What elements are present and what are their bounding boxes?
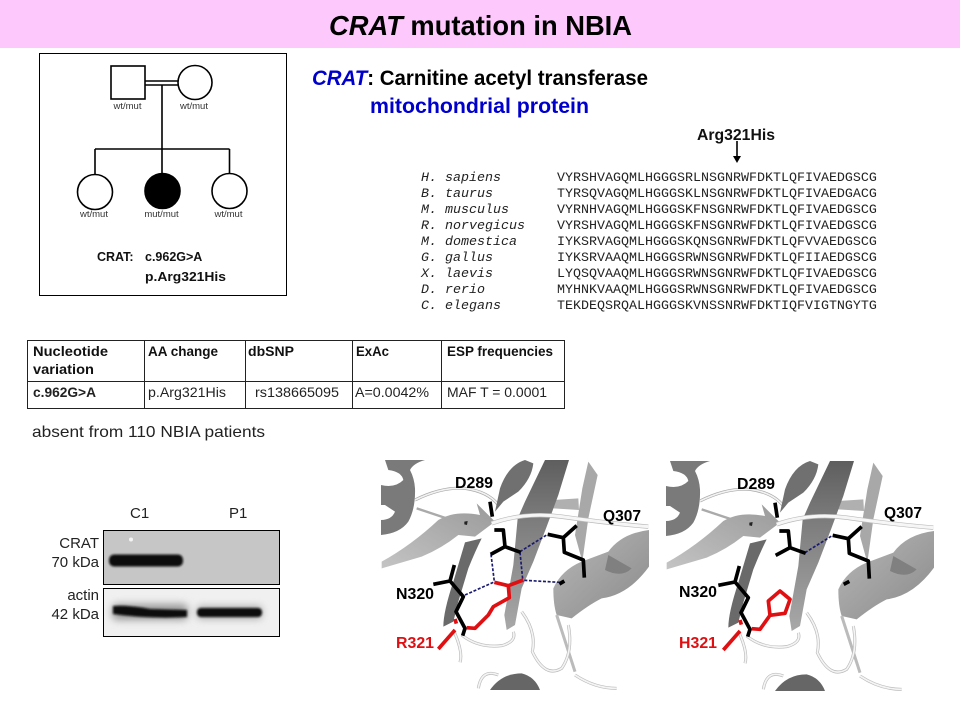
variant table bbox=[27, 340, 565, 409]
title banner: CRAT mutation in NBIA bbox=[329, 10, 632, 41]
genotype labels: wt/mut bbox=[179, 101, 208, 112]
table header: variation bbox=[33, 362, 94, 377]
note: absent from patients: absent from 110 NBIA patients bbox=[32, 424, 265, 441]
blot: CRAT bbox=[104, 530, 280, 584]
residue labels: Q307 bbox=[884, 505, 922, 522]
ribbons bbox=[666, 461, 934, 691]
lane labels: C1 bbox=[130, 505, 149, 522]
black residues bbox=[718, 503, 869, 637]
residue labels: R321 bbox=[396, 635, 434, 652]
blot labels: 42 kDa bbox=[51, 606, 100, 623]
blot: actin bbox=[104, 588, 280, 636]
table header: ESP frequencies bbox=[447, 344, 553, 359]
table row: p.Arg321His bbox=[148, 385, 226, 400]
sequence alignment: MYHNKVAAQMLHGGGSRWNSGNRWFDKTLQFIVAEDGSCG bbox=[557, 283, 877, 298]
red residue bbox=[723, 591, 790, 650]
child 3 symbol bbox=[212, 174, 247, 208]
sequence alignment: M. musculus bbox=[421, 203, 509, 218]
residue labels: D289 bbox=[737, 476, 775, 493]
sequence alignment: VYRSHVAGQMLHGGGSKFNSGNRWFDKTLQFIVAEDGSCG bbox=[557, 219, 877, 234]
hydrogen bonds bbox=[465, 534, 560, 595]
mutation label bbox=[97, 250, 226, 284]
table header: dbSNP bbox=[248, 344, 294, 359]
heading: gene name: mitochondrial protein bbox=[370, 95, 589, 118]
table header: ExAc bbox=[356, 344, 389, 359]
ribbons bbox=[381, 460, 649, 690]
panel: western blot bbox=[51, 505, 280, 636]
blot labels bbox=[51, 535, 100, 623]
sequence alignment: VYRNHVAGQMLHGGGSKFNSGNRWFDKTLQFIVAEDGSCG bbox=[557, 203, 877, 218]
table row: A=0.0042% bbox=[355, 385, 429, 400]
sequence alignment: M. domestica bbox=[421, 235, 517, 250]
genotype labels: wt/mut bbox=[214, 209, 243, 220]
residue labels: Q307 bbox=[603, 508, 641, 525]
residue labels bbox=[396, 475, 641, 652]
title banner bbox=[0, 0, 960, 48]
red residue bbox=[438, 580, 523, 649]
blot labels: actin bbox=[67, 587, 99, 604]
genotype labels: wt/mut bbox=[113, 101, 142, 112]
genotype labels: wt/mut bbox=[79, 209, 108, 220]
residue labels: N320 bbox=[396, 586, 434, 603]
genotype labels: mut/mut bbox=[144, 209, 179, 220]
hydrogen bond bbox=[805, 535, 833, 553]
blot labels: CRAT bbox=[59, 535, 99, 552]
lane labels: P1 bbox=[229, 505, 247, 522]
sequence alignment: IYKSRVAAQMLHGGGSRWNSGNRWFDKTLQFIIAEDGSCG bbox=[557, 251, 877, 266]
sequence alignment: D. rerio bbox=[421, 283, 485, 298]
mutation label: CRAT: bbox=[97, 250, 134, 264]
sequence alignment: G. gallus bbox=[421, 251, 493, 266]
sequence alignment: LYQSQVAAQMLHGGGSRWNSGNRWFDKTLQFIVAEDGSCG bbox=[557, 267, 877, 282]
sequence alignment: B. taurus bbox=[421, 187, 493, 202]
sequence alignment: IYKSRVAGQMLHGGGSKQNSGNRWFDKTLQFVVAEDGSCG bbox=[557, 235, 877, 250]
mother symbol bbox=[178, 66, 212, 100]
residue labels bbox=[679, 476, 922, 652]
callout: mutation arrow bbox=[697, 127, 775, 163]
affected child symbol bbox=[145, 174, 180, 208]
table row: rs138665095 bbox=[255, 385, 339, 400]
sequence alignment: TEKDEQSRQALHGGGSKVNSSNRWFDKTIQFVIGTNGYTG bbox=[557, 299, 877, 314]
sequence alignment: VYRSHVAGQMLHGGGSRLNSGNRWFDKTLQFIVAEDGSCG bbox=[557, 171, 877, 186]
table row: MAF T = 0.0001 bbox=[447, 385, 547, 400]
table row: c.962G>A bbox=[33, 385, 96, 400]
callout: mutation arrow: Arg321His bbox=[697, 127, 775, 144]
table row bbox=[33, 385, 547, 400]
black residues bbox=[433, 502, 584, 636]
panel: pedigree bbox=[40, 54, 286, 296]
residue labels: D289 bbox=[455, 475, 493, 492]
genotype labels bbox=[79, 101, 243, 220]
lane labels bbox=[130, 505, 247, 522]
table header: Nucleotide bbox=[33, 344, 109, 359]
child 1 symbol bbox=[78, 174, 112, 210]
blot labels: 70 kDa bbox=[51, 554, 100, 571]
father symbol bbox=[111, 66, 145, 99]
sequence alignment: TYRSQVAGQMLHGGGSKLNSGNRWFDKTLQFIVAEDGACG bbox=[557, 187, 877, 202]
sequence alignment: X. laevis bbox=[420, 267, 493, 282]
heading: gene name: CRAT: Carnitine acetyl transferase bbox=[312, 67, 648, 90]
sequence alignment: R. norvegicus bbox=[421, 219, 525, 234]
table header: AA change bbox=[148, 344, 218, 359]
table header bbox=[33, 344, 553, 377]
panel: wild-type structure bbox=[381, 460, 649, 690]
pedigree lines bbox=[95, 81, 230, 174]
residue labels: N320 bbox=[679, 584, 717, 601]
residue labels: H321 bbox=[679, 635, 717, 652]
mutation label: c.962G>A bbox=[145, 250, 202, 264]
mutation label: p.Arg321His bbox=[145, 270, 226, 284]
sequence alignment: C. elegans bbox=[421, 299, 501, 314]
panel: mutant structure bbox=[666, 461, 934, 691]
heading: gene name bbox=[312, 67, 648, 118]
sequence alignment: H. sapiens bbox=[421, 171, 501, 186]
sequence alignment bbox=[420, 171, 877, 314]
